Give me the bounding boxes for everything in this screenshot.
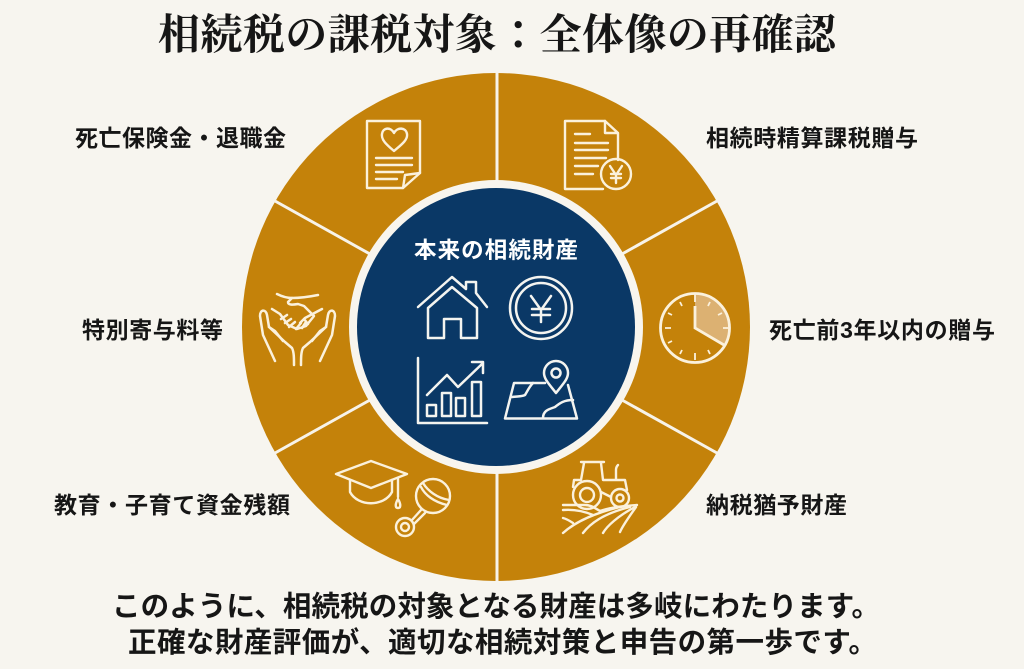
center circle: original inherited assets bbox=[357, 188, 635, 466]
icon: graduation cap and rattle bbox=[336, 461, 450, 536]
label: settlement tax gifts: 相続時精算課税贈与 bbox=[706, 125, 918, 151]
label: death insurance and retirement: 死亡保険金・退職金 bbox=[75, 125, 286, 151]
wheel: gold ring bbox=[242, 73, 750, 581]
icon: yen coin bbox=[510, 277, 572, 339]
footer text: このように、相続税の対象となる財産は多岐にわたります。 bbox=[112, 591, 880, 623]
center heading: 本来の相続財産 bbox=[414, 238, 578, 263]
label: deferred tax assets: 納税猶予財産 bbox=[706, 492, 847, 518]
icon: policy document with heart bbox=[367, 121, 420, 188]
label: gifts within 3 years: 死亡前3年以内の贈与 bbox=[769, 317, 995, 343]
footer text bbox=[112, 591, 880, 659]
label: education and child-rearing funds: 教育・子育て資金残額 bbox=[54, 492, 290, 518]
icon: map with pin bbox=[505, 361, 577, 418]
icon: handshake in hands bbox=[260, 294, 335, 365]
title: 相続税の課税対象：全体像の再確認 bbox=[158, 12, 839, 59]
label: special contributions: 特別寄与料等 bbox=[82, 317, 223, 343]
icon: house bbox=[418, 277, 487, 338]
footer text: 正確な財産評価が、適切な相続対策と申告の第一歩です。 bbox=[128, 626, 877, 659]
icon: growth chart bbox=[418, 358, 487, 423]
icon: tractor on field bbox=[563, 462, 637, 533]
icon: document with yen bbox=[565, 121, 631, 189]
icon: clock bbox=[660, 294, 730, 362]
